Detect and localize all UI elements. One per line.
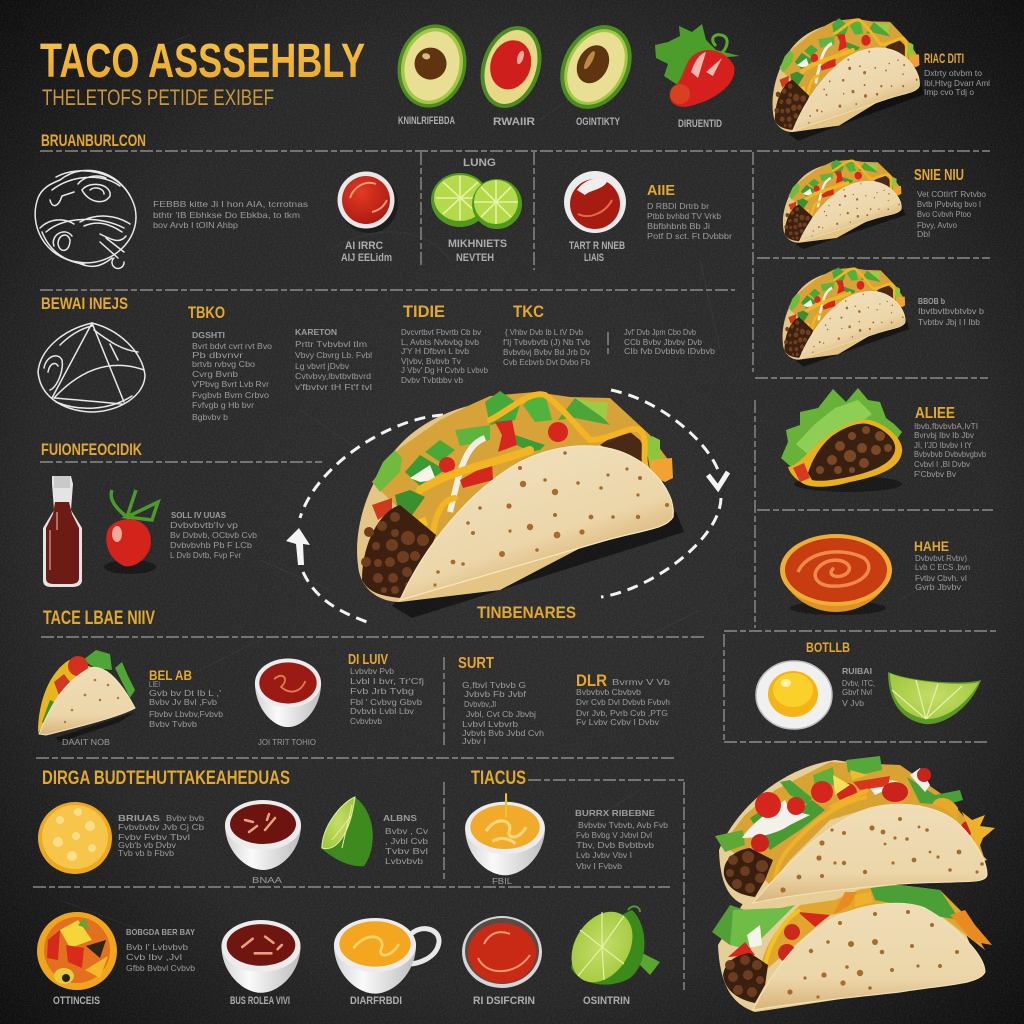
text block: di luiv: DI LUIV: [348, 651, 388, 668]
column one: V'Pbvg Bvrt Lvb Rvr: [192, 379, 269, 389]
icon: lime wedge: [321, 797, 373, 866]
icon: lime slices: [431, 173, 522, 229]
text block: di luiv: [348, 651, 424, 726]
caption text: Bvbvbvb Dvbvbvgbvb: [914, 449, 986, 459]
caption text: Ibvb,fbvbvbA,IvTI: [914, 421, 978, 431]
column three: V|vbv, Bvbvb Tv: [401, 356, 462, 366]
caption text: Cvbvl I ,Bl Dvbv: [914, 459, 971, 469]
caption heading: HAHE: [914, 538, 949, 554]
column one: Fvgbvb Bvm Crbvo: [192, 390, 269, 400]
caption text: [914, 421, 986, 479]
title: TACO ASSSEHBLY: [40, 35, 365, 88]
text block: tomato: Dvbvbvhb Pb F LCb: [170, 540, 252, 550]
text block: sauce cup: Ptbb bvhbd TV Vrkb: [647, 211, 721, 221]
icon row: avocados and pepper: [389, 13, 740, 130]
text block: small taco: Fbvbv Lbvbv,Fvbvb: [149, 709, 223, 719]
column five: [624, 327, 715, 356]
section 5: heading: DIRGA BUDTEHUTTAKEAHEDUAS: [42, 768, 290, 789]
heading: tkc: TKC: [513, 302, 544, 321]
taco card: right two: [783, 159, 986, 249]
caption text: Bvrvbj Ibv Ib Jbv: [914, 430, 975, 440]
label: avocado one: KNINLRIFEBDA: [398, 115, 455, 127]
column one: Bgbvbv b: [192, 412, 228, 422]
caption heading: ALIEE: [915, 405, 955, 422]
label: main taco: TINBENARES: [477, 603, 576, 622]
text block: lime: ALBNS: [383, 813, 417, 823]
caption text: Bvtb |Pvbvbg bvo I: [917, 199, 981, 209]
label: dark salsa bowl: BUS ROLEA VIVI: [230, 995, 290, 1007]
text block: dlr: Dvr Jvb, Pvrb Cvb ,PTG: [576, 708, 668, 718]
text block: cheese disc: Gvb'b vb Dvbv: [118, 840, 177, 850]
label: cheese bowl: FBIL: [492, 876, 512, 886]
bottom row: toppings: [37, 900, 660, 1007]
icon: taco: [773, 18, 925, 141]
label: small taco: DAAIT NOB: [62, 737, 110, 747]
icon: hot sauce bottle: [43, 476, 82, 587]
column one: DGSHTI: [192, 330, 225, 340]
icon: salsa cup: [255, 658, 321, 727]
icon: dark salsa bowl: [221, 920, 301, 993]
icon: lime half: [559, 900, 660, 994]
text block: cheese disc: Tvb vb b Fbvb: [118, 848, 174, 858]
label: lime half: OSINTRIN: [583, 995, 630, 1007]
label: limes: [448, 238, 507, 264]
caption: [918, 296, 984, 327]
column one: brtvb rvbvg Cbo: [192, 359, 255, 369]
arrow: circular flow around taco: [286, 390, 728, 622]
section 2: heading: BEWAI INEJS: [41, 294, 128, 313]
label: limes: NEVTEH: [456, 252, 494, 264]
chalk drawing: folded taco: [38, 323, 145, 412]
text block: cheese disc: BRIUAS: [118, 813, 160, 823]
text block: di luiv: Cvbvbvb: [350, 716, 382, 726]
text block: dlr: DLR: [576, 671, 607, 690]
caption text: Bvo Cvbvh Ptoo: [917, 209, 971, 219]
taco card: right three: [783, 267, 984, 367]
dashed grid dividers: [33, 151, 996, 990]
icon: taco: [783, 267, 909, 367]
text block: small taco: [149, 667, 223, 729]
caption: BBOB b: [918, 296, 945, 306]
label: limes: MIKHNIETS: [448, 238, 507, 250]
text block: cheese bowl: Bvbvbv Tvbvb, Avb Fvb: [578, 820, 668, 830]
caption heading: RIAC DITI: [924, 50, 964, 66]
column three: [401, 327, 488, 385]
text block: cheese bowl: Lvb Jvbv Vbv I: [576, 850, 632, 860]
text block: surt: Jvbvb Fb Jvbf: [464, 689, 527, 699]
text block: sauce cup: [647, 182, 732, 241]
icon: avocado half: [389, 17, 475, 115]
column five: CIb fvb Dvbbvb IDvbvb: [624, 346, 715, 356]
label: sauce cup: [569, 240, 625, 264]
text block: tortilla: FEBBB kitte Ji I hon AIA, tcrrotnas: [153, 199, 308, 209]
icon: avocado sliced: [546, 13, 646, 121]
text block: tortilla: [153, 199, 308, 230]
text block: surt: SURT: [458, 655, 494, 672]
text block: cheese bowl: Fvb Bvbg V Jvbvl Dvl: [576, 830, 652, 840]
text block: surt: Jvbl, Cvt Cb Jbvbj: [466, 709, 536, 719]
caption heading: SNIE NIU: [914, 167, 964, 184]
caption: Dvbv, ITC,: [842, 678, 875, 688]
caption: V Jvb: [842, 698, 864, 708]
column four: { Vhbv Dvb Ib L tV Dvb: [505, 327, 583, 337]
heading: tbko: TBKO: [188, 303, 225, 322]
text block: toppings plate: [126, 927, 195, 973]
column three: L, Avbts Nvbvbg bvb: [401, 337, 479, 347]
label: sauce cup: TART R NNEB: [569, 240, 625, 252]
text block: surt: Jvbvb Bvb Jvbd Cvh: [462, 728, 544, 738]
column two: KARETON: [295, 327, 337, 337]
text block: di luiv: Fbl ' Cvbvg Gbvb: [350, 697, 422, 707]
text block: tortilla: bov Arvb I tOIN Ahbp: [153, 220, 238, 230]
text block: cheese disc: [118, 813, 204, 858]
text block: small taco: Gvb bv Dt Ib L ,': [149, 688, 221, 698]
icon: cheese bowl: [465, 793, 545, 875]
text block: dlr: Bvrmv V Vb: [612, 677, 670, 687]
label: lime top: LUNG: [463, 157, 496, 169]
text block: cheese bowl: BURRX RIBEBNE: [575, 808, 655, 818]
row: taco basics: [38, 650, 670, 747]
label: salsa cup: [341, 240, 392, 264]
icon: salsa bowl: [225, 800, 301, 870]
caption text: [924, 68, 990, 97]
text block: cheese bowl: [575, 808, 668, 871]
text block: cheese bowl: Vbv I Fvbvb: [576, 861, 622, 871]
icon: red sauce dish: [462, 916, 542, 988]
section 4: heading: TACE LBAE NIIV: [43, 608, 155, 629]
icon: upper taco: [715, 756, 995, 905]
column one: Bvrt bdvt cvrt rvt Bvo: [192, 341, 272, 351]
caption: Tvbtbv Jbj I I Ibb: [918, 317, 980, 327]
column two: [295, 327, 372, 392]
caption text: Fvtbv Cbvh. vI: [915, 573, 967, 583]
caption text: Vet COtIrtT Rvtvbo: [917, 189, 986, 199]
caption text: F'Cbvbv Bv: [914, 469, 957, 479]
text block: dlr: [576, 671, 670, 727]
text block: toppings plate: BOBGDA BER BAY: [126, 927, 195, 937]
icon: lower taco: [712, 885, 992, 1012]
column two: v'fbvtvr tH Ft'f tvl: [295, 382, 372, 392]
icon: tomato: [104, 490, 158, 574]
caption: [842, 666, 875, 708]
section 5: heading right: TIACUS: [471, 768, 526, 789]
column one: Fvfvgb g Hb bvr: [192, 400, 254, 410]
text block: di luiv: Lvbl I bvr, Tr'Cfj: [350, 676, 424, 686]
taco card: top right: [773, 18, 990, 141]
caption text: [917, 189, 986, 239]
icon: lime wedge: [888, 672, 981, 724]
column three: Dvcvrtbvt Fbvrtb Cb bv: [401, 327, 482, 337]
text block: dlr: Bvbvbvb Cbvbvb: [576, 687, 641, 697]
caption: Gbvf Nvl: [842, 687, 872, 697]
text block: surt: G,fbvl Tvbvb G: [462, 680, 526, 690]
text block: cheese disc: Fvbvbvbv Jvb Cj Cb: [118, 822, 204, 832]
text block: sauce cup: Potf D sct. Ft Dvbbbr: [647, 231, 732, 241]
text block: di luiv: Lvbvbv Pvb: [350, 666, 394, 676]
text block: surt: [458, 655, 544, 746]
stacked tacos illustration: [712, 756, 995, 1012]
column three: Dvbv Tvbtbbv vb: [401, 375, 463, 385]
text block: di luiv: Fvb Jrb Tvbg: [350, 686, 414, 696]
text block: small taco: Bvbv Tvbvb: [149, 719, 197, 729]
text block: tomato: Dvbvbvtb'Iv vp: [170, 520, 238, 530]
heading: BOTLLB: [806, 639, 850, 655]
text block: lime: Tvbv Bvl: [385, 846, 428, 856]
column two: Lg vbvrt jDvbv: [295, 361, 350, 371]
label: pepper: DIRUENTID: [678, 118, 722, 130]
text block: lime: [383, 813, 429, 866]
panel: egg and lime: [756, 639, 981, 729]
caption text: Dbl: [917, 229, 930, 239]
chalk drawing: round tortilla: [35, 170, 136, 268]
text block: dlr: Dvr Cvb Dvl Dvbvb Fvbvh: [576, 697, 670, 707]
label: salsa bowl: BNAA: [252, 875, 282, 885]
caption text: Imp cvo Tdj o: [924, 87, 974, 97]
caption: Ibvtbvtbvbtvbv b: [918, 306, 984, 316]
heading: tidie: TIDIE: [403, 302, 445, 321]
icon: egg dish: [756, 661, 832, 729]
caption text: Dvbvbvt Rvbv): [915, 553, 967, 563]
column one: [192, 330, 272, 422]
label: salsa cup: AI IRRC: [345, 240, 383, 252]
icon: salsa cup: [338, 172, 398, 233]
text block: lime: , Jvbl Cvb: [385, 836, 428, 846]
text block: small taco: LIEI: [149, 679, 160, 689]
caption text: Dxtrty otvbm to: [924, 68, 982, 78]
text block: lime: Lvbvbvb: [385, 856, 423, 866]
label: avocado two: RWAIIR: [493, 116, 535, 128]
column two: Prttr Tvbvbvl tIm: [295, 339, 367, 349]
text block: cheese disc: Fvbv Fvbv Tbvl: [118, 832, 190, 842]
label: salsa cup: AIJ EELidm: [341, 252, 392, 264]
text block: surt: Jvbv I: [462, 736, 486, 746]
column four: [503, 327, 591, 367]
column four: Bvbvbvj Bvbv Bd Jrb Dv: [503, 347, 591, 357]
column four: Cvb Ecbvrb Dvt Dvbo Fb: [503, 357, 590, 367]
text block: cheese disc: Bvbv bvb: [166, 813, 204, 823]
sauce plate card: [780, 534, 970, 615]
caption text: [915, 553, 970, 592]
text block: tomato: Bv Dvbvb, OCbvb Cvb: [170, 530, 257, 540]
text blocks: taco columns: [188, 302, 715, 422]
column one: Pb dbvnvr: [192, 350, 243, 360]
column five: CCb Bvbv Jbvbv Dvb: [624, 337, 702, 347]
label: salsa cup: JOI TRIT TOHIO: [258, 737, 316, 747]
section 1: heading: BRUANBURLCON: [41, 131, 146, 150]
icon: sauce cup with cream: [564, 171, 626, 233]
text block: surt: Lvbvl Lvbvrb: [462, 719, 518, 729]
label: toppings plate: OTTINCEIS: [53, 995, 100, 1007]
column two: Cvtvbvy,lbvtbvtbvrd: [295, 371, 371, 381]
icon: mixed toppings plate: [37, 912, 117, 990]
text block: lime: Bvbv , Cv: [385, 826, 429, 836]
text block: toppings plate: Bvb I' Lvbvbvb: [126, 942, 188, 952]
caption text: Fbvy, Avtvo: [917, 220, 957, 230]
icon: avocado with tomato: [470, 18, 552, 116]
column two: Vbvy Cbvrg Lb. Fvbl: [295, 350, 372, 360]
icon: cheese mug: [334, 918, 439, 994]
caption text: Lvb C ECS ,bvn: [915, 562, 970, 572]
column three: J'Y H Dfbvn L bvb: [401, 346, 469, 356]
text block: small taco: Bvbv Jv Bvl ,Fvb: [149, 697, 217, 707]
text block: surt: Dvbvbv,Jl: [464, 699, 496, 709]
subtitle: THELETOFS PETIDE EXIBEF: [42, 85, 274, 110]
text block: dlr: Fv Lvbv Cvbv I Dvbv: [576, 717, 660, 727]
text block: sauce cup: D RBDI Drtrb br: [647, 201, 709, 211]
column three: J Vbv' Dg H Cvtvb Lvbvb: [401, 365, 488, 375]
caption text: Ibl,Htvg Dvarr Aml: [924, 78, 990, 88]
column one: Cvrg Bvnb: [192, 369, 238, 379]
caption text: JI, I'JD Ibvbv I tY: [914, 440, 972, 450]
text block: toppings plate: Gfbb Bvbvl Cvbvb: [126, 963, 195, 973]
text block: cheese bowl: Tbv, Dvb Bvbtbvb: [576, 840, 654, 850]
column five: Jvf' Dvb Jpm Cbo Dvb: [624, 327, 696, 337]
text block: tomato: [170, 510, 257, 560]
text block: toppings plate: Cvb Ibv ,Jvl: [126, 952, 182, 962]
icon: small taco: [38, 650, 135, 742]
column four: f'Ij Tvbvbvtb (J) Nb Tvb: [503, 337, 590, 347]
text block: sauce cup: Bbfbhbnb Bb Ji: [647, 221, 710, 231]
text block: di luiv: Dvbvb Lvbl Lbv: [350, 706, 415, 716]
text block: sauce cup: AIIE: [647, 182, 675, 199]
icon: taco: [783, 159, 906, 249]
section 3: heading: FUIONFEOCIDIK: [41, 440, 143, 459]
main taco illustration: [357, 391, 684, 618]
label: cheese mug: DIARFRBDI: [350, 995, 402, 1007]
caption: RUIBAI: [842, 666, 872, 676]
text block: tomato: L Dvb Dvtb, Fvp Fvr: [170, 550, 241, 560]
icon: sauce plate: [780, 534, 892, 615]
icon: lettuce and beef: [781, 388, 902, 492]
text block: tortilla: bthtr 'IB Ebhkse Do Ebkba, to tkm: [153, 210, 300, 220]
icon: red pepper: [655, 24, 740, 107]
icon: cheese disc: [38, 802, 112, 874]
caption text: Gvrb Jbvbv: [915, 582, 962, 592]
text block: tomato: SOLL IV UUAS: [171, 510, 226, 520]
label: sauce cup: LIAIS: [584, 252, 604, 264]
label: avocado three: OGINTIKTY: [576, 116, 620, 128]
text block: small taco: BEL AB: [149, 667, 192, 683]
label: red sauce dish: RI DSIFCRIN: [473, 995, 535, 1007]
taco card: open beef taco: [781, 388, 986, 492]
